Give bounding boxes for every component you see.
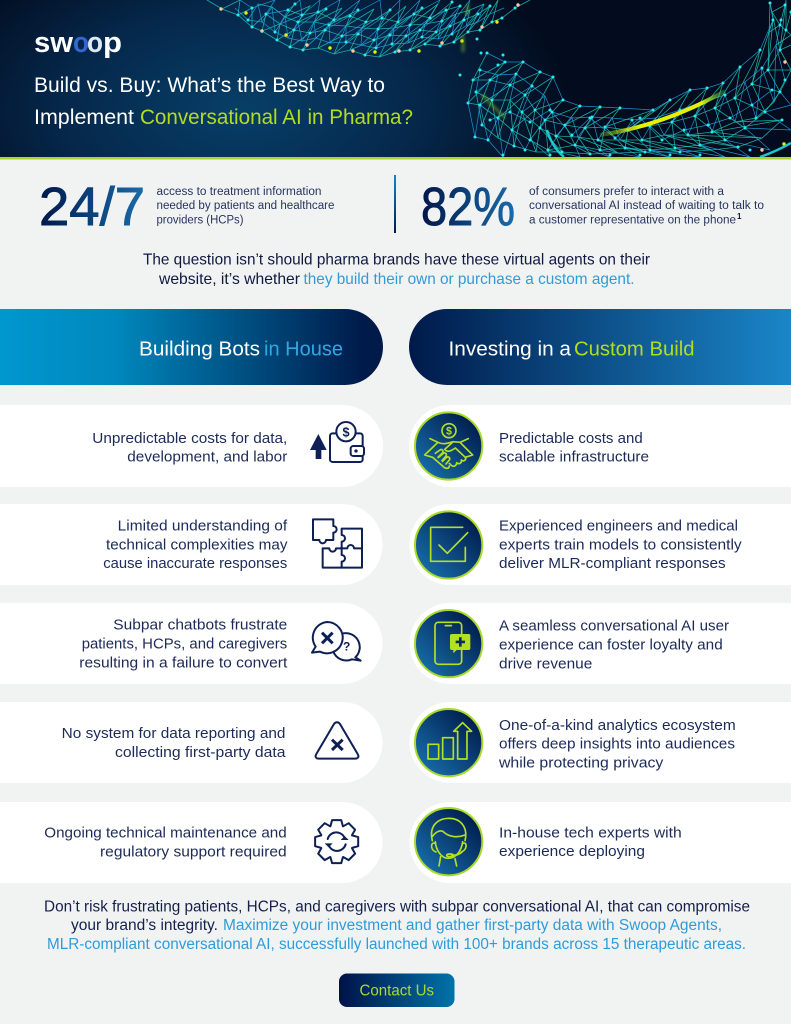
icon: handshake with coin (415, 412, 482, 480)
stat description (529, 186, 764, 226)
icon: gear with refresh arrows (315, 820, 358, 863)
column header: investing in a custom build (409, 309, 791, 385)
row 3 left: subpar chatbots: Subpar chatbots frustrate (113, 616, 287, 634)
question text: The question isn’t should pharma brands have these virtual agents on their (143, 252, 651, 268)
row 1 right: predictable costs: scalable infrastructure (499, 448, 649, 466)
row 2 left: limited understanding: cause inaccurate responses (103, 555, 287, 572)
row 3 left: subpar chatbots: patients, HCPs, and caregivers (82, 636, 287, 652)
stat description: providers (HCPs) (156, 214, 244, 226)
logo: swoop: o (73, 27, 89, 59)
stat: 82% (421, 177, 764, 237)
row 4 right: analytics ecosystem: One-of-a-kind analytics ecosystem (499, 717, 736, 734)
row 4 right: analytics ecosystem: offers deep insights into audiences (499, 736, 735, 753)
closing text: your brand’s integrity. (71, 917, 218, 934)
column header: building bots in house: in House (264, 338, 343, 360)
row 4 right: analytics ecosystem (410, 702, 791, 783)
divider (394, 175, 396, 233)
closing text: MLR-compliant conversational AI, successfully launched with 100+ brands across 15 therapeutic areas. (47, 936, 746, 953)
row 3 right: seamless experience (410, 603, 791, 684)
row 5 right: in-house tech experts (410, 802, 791, 883)
stat description: a customer representative on the phone (529, 214, 736, 226)
stat description: access to treatment information (156, 186, 322, 198)
row 2 left: limited understanding: Limited understanding of (118, 518, 288, 534)
stat: 24/7 (39, 177, 334, 237)
question text (143, 252, 651, 288)
stat description: needed by patients and healthcare (156, 200, 334, 212)
icon: handshake with coin: $ (446, 426, 452, 438)
icon: chat bubbles: ? (343, 640, 350, 654)
row 4 left: no data reporting: No system for data reporting and (62, 725, 286, 742)
title: Implement (34, 106, 134, 129)
row 5 right: in-house tech experts: In-house tech experts with (499, 824, 682, 841)
stat description (156, 186, 334, 226)
logo: swoop: p (103, 27, 122, 59)
row 5 left: ongoing maintenance: regulatory support required (100, 844, 287, 860)
row 2 right: experienced engineers: Experienced engineers and medical (499, 518, 738, 534)
row 1 left: unpredictable costs: development, and labor (127, 448, 287, 466)
title: Build vs. Buy: What’s the Best Way to (34, 74, 385, 97)
icon: puzzle pieces (313, 519, 362, 568)
header banner (0, 0, 791, 157)
column header: investing in a custom build: Investing in a (448, 338, 572, 360)
row 2 right: experienced engineers: deliver MLR-compliant responses (499, 555, 726, 572)
row 3 right: seamless experience: drive revenue (499, 656, 592, 672)
row 1 right: predictable costs: Predictable costs and (499, 430, 643, 447)
glowing yellow arc (600, 91, 725, 135)
row 4 left: no data reporting (0, 702, 382, 783)
icon: warning triangle (316, 722, 358, 759)
stat: 24/7: 24/7 (39, 177, 145, 237)
icon: wallet with up arrow: $ (342, 425, 350, 439)
row 3 right: seamless experience: experience can foster loyalty and (499, 636, 723, 654)
icon: wallet with up arrow (310, 422, 364, 462)
row 2 left: limited understanding: technical complexities may (106, 536, 288, 554)
question text: website, it’s whether (158, 271, 301, 288)
stat description: of consumers prefer to interact with a (529, 186, 725, 198)
row 4 left: no data reporting: collecting first-party data (115, 744, 286, 761)
icon: phone with medical chat (415, 610, 482, 677)
row 2 right: experienced engineers (410, 504, 791, 585)
stat description: conversational AI instead of waiting to talk to (529, 200, 764, 212)
row 1 right: predictable costs (409, 405, 791, 487)
column header: building bots in house: Building Bots (139, 338, 260, 360)
button: contact us: Contact Us (360, 982, 434, 1000)
question text: they build their own or purchase a custom agent. (304, 271, 634, 288)
logo: swoop (34, 27, 122, 59)
row 4 right: analytics ecosystem: while protecting privacy (498, 754, 664, 771)
title (34, 74, 413, 129)
button: contact us (339, 974, 454, 1007)
logo: swoop: sw (34, 27, 73, 59)
closing text: Maximize your investment and gather first-party data with Swoop Agents, (223, 917, 722, 934)
row 5 right: in-house tech experts: experience deploying (499, 843, 645, 860)
row 3 left: subpar chatbots (0, 603, 382, 684)
row 2 left: limited understanding (0, 504, 382, 585)
row 3 left: subpar chatbots: resulting in a failure to convert (79, 654, 288, 671)
stat description: 1 (737, 212, 742, 221)
row 5 left: ongoing maintenance: Ongoing technical maintenance and (44, 824, 287, 842)
row 5 left: ongoing maintenance (0, 802, 382, 883)
logo: swoop: o (87, 27, 103, 59)
column header: building bots in house (0, 309, 383, 385)
row 1 left: unpredictable costs: Unpredictable costs for data, (92, 430, 287, 447)
icon: chat bubbles (312, 622, 361, 661)
row 2 right: experienced engineers: experts train models to consistently (499, 536, 742, 554)
column header: investing in a custom build: Custom Build (574, 338, 694, 360)
icon: growth bars (415, 709, 482, 776)
closing text: Don’t risk frustrating patients, HCPs, and caregivers with subpar conversational AI, that can compromise (44, 898, 750, 916)
stat: 82%: 82% (421, 177, 515, 237)
header accent line (0, 157, 791, 160)
network mesh graphic (207, 0, 791, 157)
closing text (44, 898, 750, 953)
row 3 right: seamless experience: A seamless conversational AI user (499, 618, 729, 634)
title: Conversational AI in Pharma? (140, 106, 413, 129)
icon: support agent (415, 808, 482, 875)
row 1 left: unpredictable costs (0, 405, 383, 487)
icon: checkbox (415, 511, 482, 579)
